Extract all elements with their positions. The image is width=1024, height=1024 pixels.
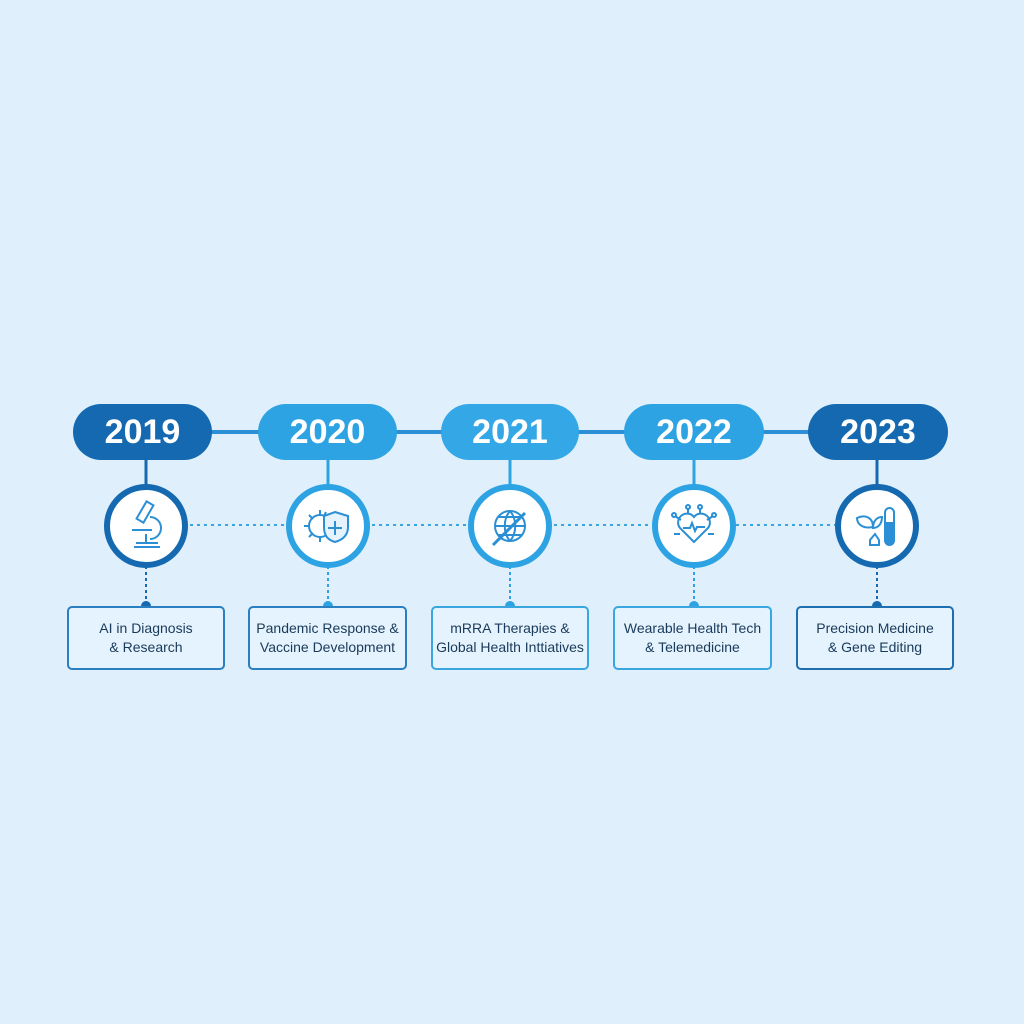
- box 2022: [613, 606, 772, 670]
- year pill 2023: [808, 404, 948, 460]
- box 2020: [248, 606, 407, 670]
- year pill 2020: 2020: [290, 413, 365, 451]
- year pill 2019: [73, 404, 212, 460]
- year pill 2022: [624, 404, 764, 460]
- icon: virus shield: [286, 484, 370, 568]
- box 2022: Wearable Health Tech: [624, 620, 761, 636]
- box 2020: Pandemic Response &: [256, 620, 399, 636]
- year pill 2019: 2019: [105, 413, 180, 451]
- box 2022: & Telemedicine: [645, 639, 740, 655]
- box 2023: & Gene Editing: [828, 639, 922, 655]
- year pill 2022: 2022: [656, 413, 732, 451]
- icon: microscope: [104, 484, 188, 568]
- box 2023: Precision Medicine: [816, 620, 934, 636]
- year pill 2023: 2023: [840, 413, 916, 451]
- box 2021: mRRA Therapies &: [450, 620, 570, 636]
- year pill 2020: [258, 404, 397, 460]
- year pill 2021: 2021: [472, 413, 548, 451]
- box 2021: [431, 606, 589, 670]
- year pill 2021: [441, 404, 579, 460]
- box 2019: & Research: [109, 639, 183, 655]
- box 2019: [67, 606, 225, 670]
- icon: heart network: [652, 484, 736, 568]
- box 2023: [796, 606, 954, 670]
- icon: leaf test tube: [835, 484, 919, 568]
- icon: globe syringe: [468, 484, 552, 568]
- box 2021: Global Health Inttiatives: [436, 639, 584, 655]
- box 2019: AI in Diagnosis: [99, 620, 193, 636]
- box 2020: Vaccine Development: [260, 639, 395, 655]
